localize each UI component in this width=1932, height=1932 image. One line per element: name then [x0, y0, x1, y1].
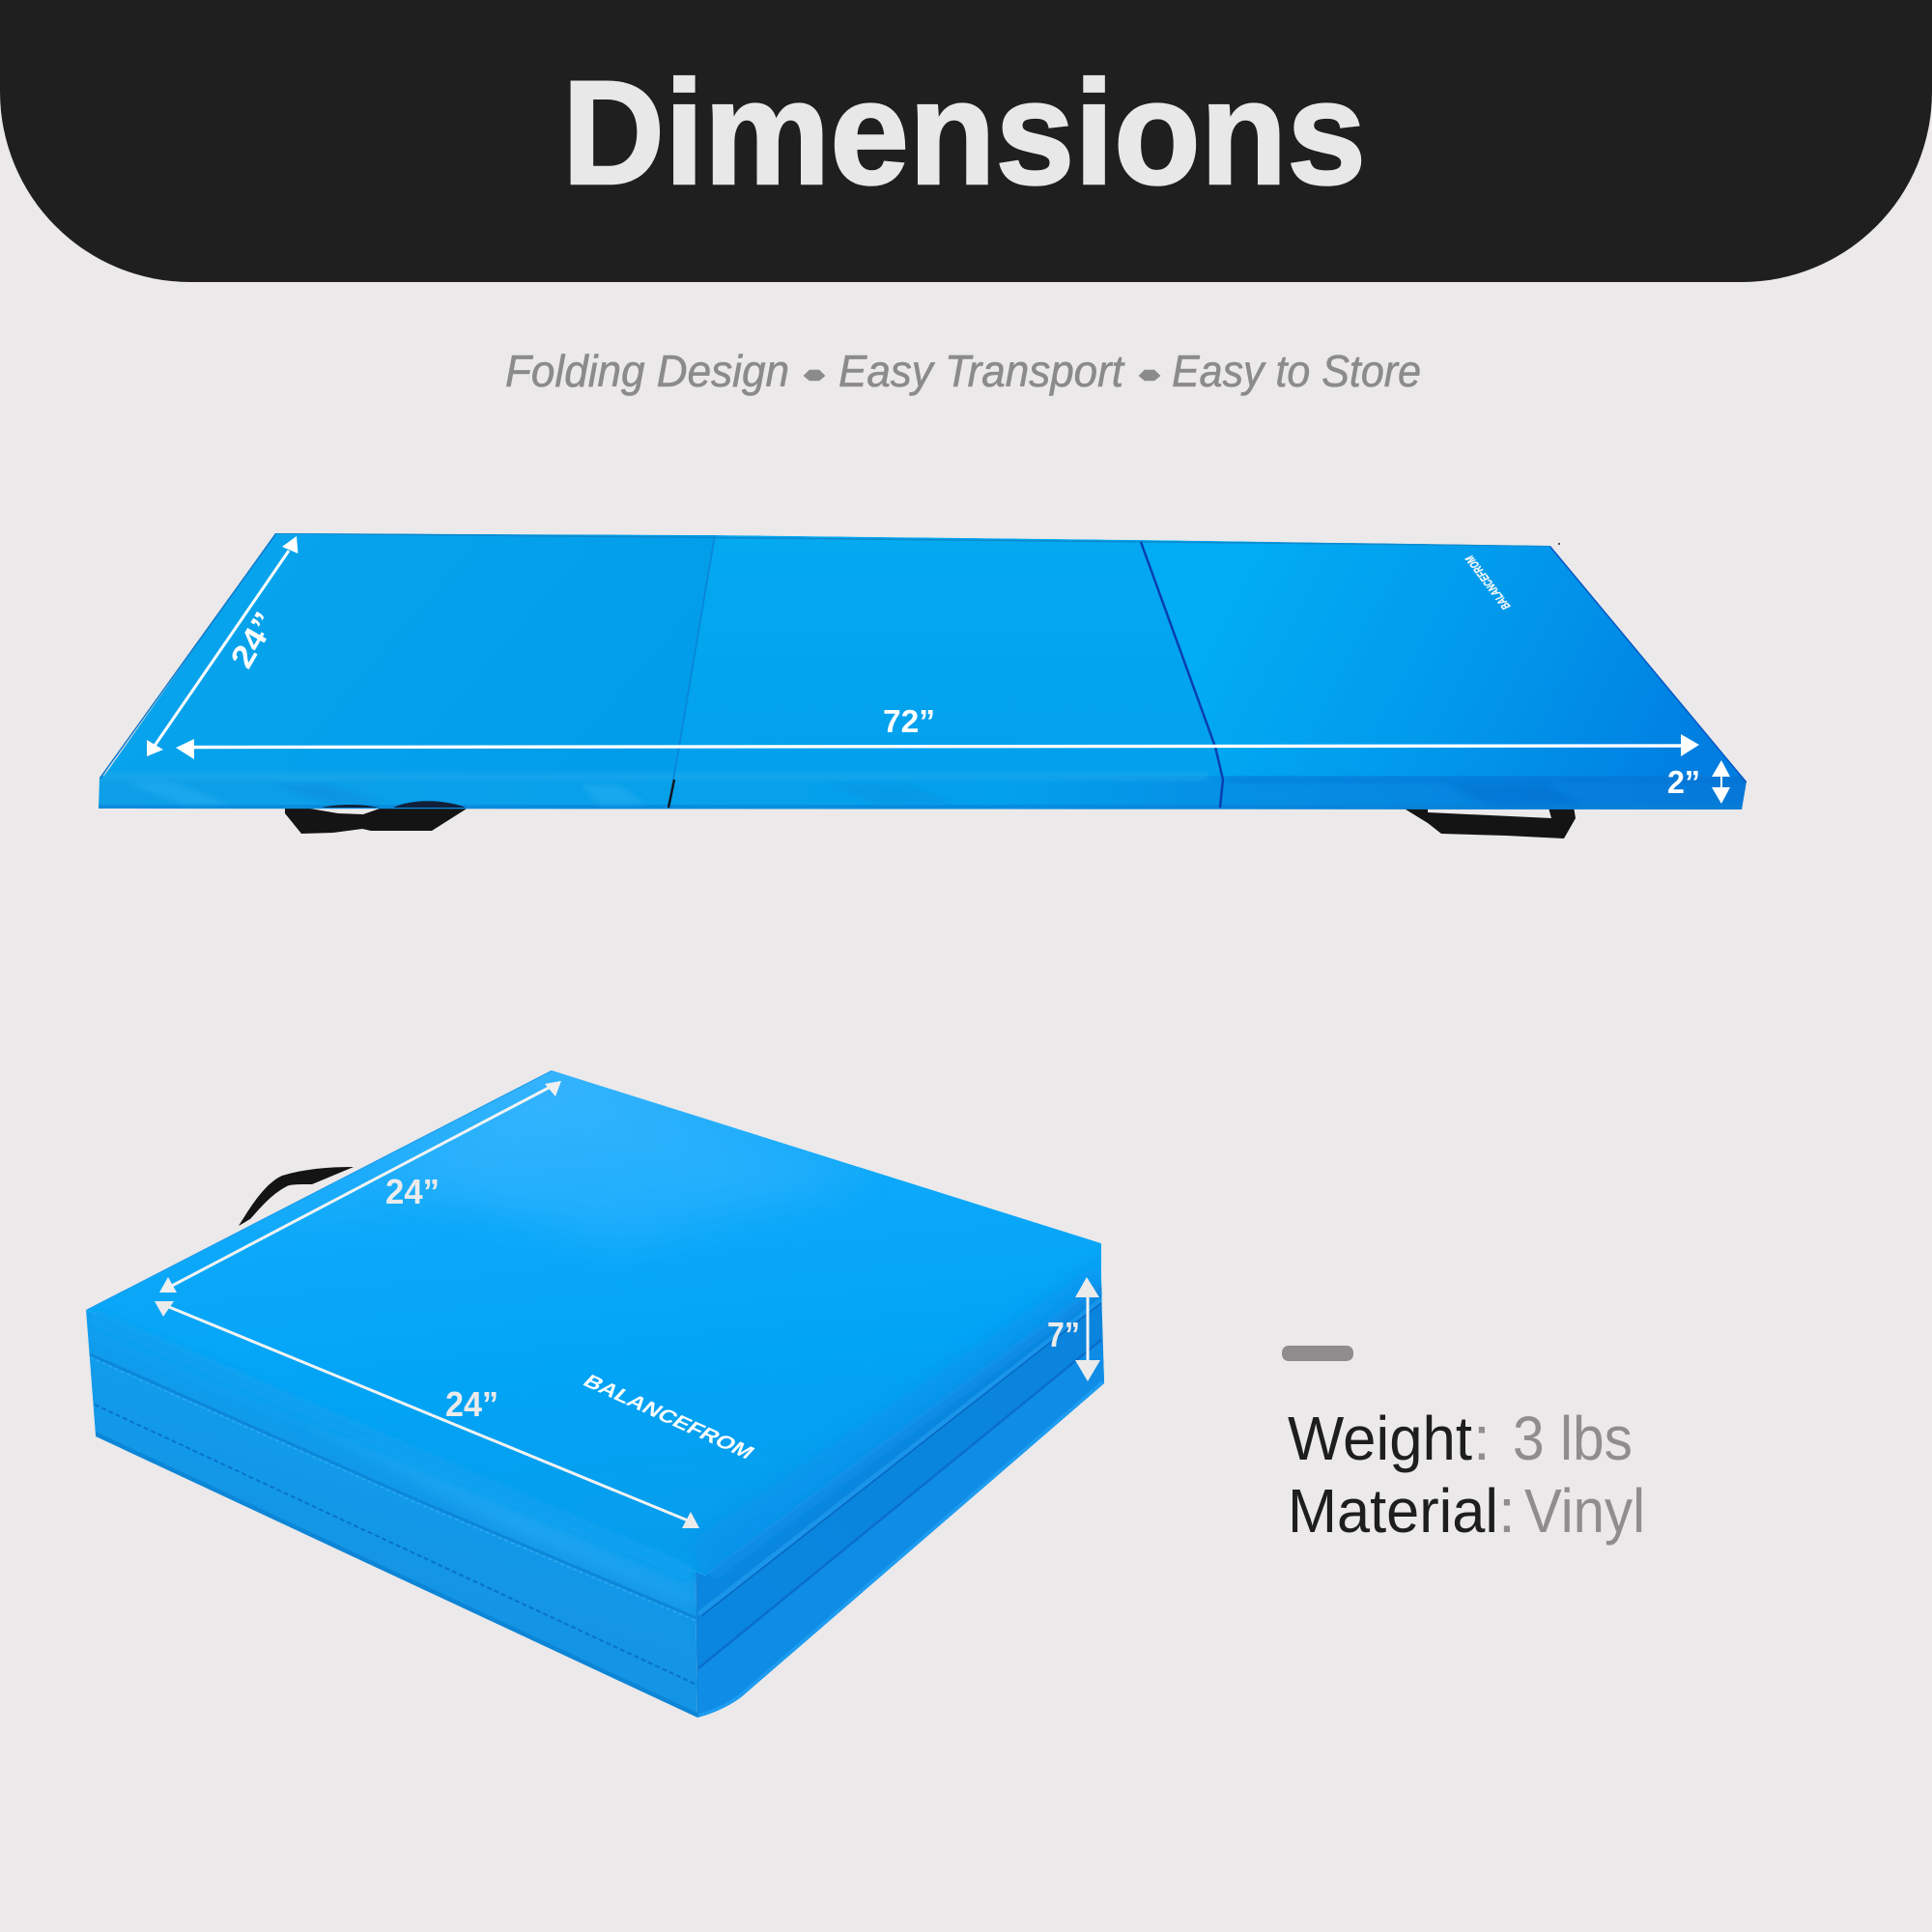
- left side face: [86, 1304, 697, 1718]
- panel: left section: [99, 533, 715, 782]
- material line: Vinyl: [1524, 1476, 1645, 1546]
- handle webbing overlapping mat edge: [322, 801, 466, 808]
- arrow: 7 inch height: [1075, 1277, 1100, 1381]
- label: 24 inch back edge: 24”: [385, 1172, 440, 1211]
- weight and material specs: [1288, 1404, 1645, 1546]
- label: 24 inch front edge: 24”: [445, 1384, 498, 1424]
- arrow: 2 inch thickness: [1712, 760, 1730, 804]
- subtitle features line: Easy to Store: [1172, 346, 1421, 396]
- label: 24 inch width: 24”: [223, 606, 283, 674]
- icon: folded mat handle: [239, 1167, 354, 1226]
- flat unfolded mat: [97, 533, 1750, 838]
- front edge band: [97, 776, 1750, 810]
- logo on folded mat: BALANCEFROM: [579, 1371, 759, 1463]
- weight line: :: [1473, 1404, 1491, 1473]
- icon: right carry handle: [1403, 807, 1576, 838]
- weight line: 3 lbs: [1513, 1404, 1633, 1473]
- arrow: 24 inch front edge: [155, 1301, 699, 1528]
- material line: [1288, 1476, 1645, 1546]
- panel: middle section: [673, 535, 1223, 782]
- subtitle features line: [505, 346, 1421, 396]
- fold notch: [668, 780, 674, 808]
- logo on flat mat: BALANCEFROM: [1463, 554, 1514, 611]
- material line: :: [1498, 1476, 1516, 1546]
- title: Dimensions: [562, 50, 1366, 215]
- fold line 1: [673, 535, 715, 780]
- label: 2 inch thickness: 2”: [1667, 764, 1700, 800]
- small speck: [1558, 543, 1560, 545]
- decorative pill marker: [1282, 1346, 1353, 1361]
- fold line 2: [1141, 542, 1223, 808]
- subtitle features line: Easy Transport: [838, 346, 1125, 396]
- header banner: [0, 0, 1932, 282]
- arrow: 24 inch width: [147, 536, 298, 756]
- soft rounded edges between faces: [92, 1287, 1101, 1577]
- subtitle features line: Folding Design: [505, 346, 789, 396]
- icon: left carry handle: [285, 800, 471, 834]
- folded mat: [86, 1070, 1107, 1719]
- weight line: [1288, 1404, 1633, 1473]
- panel: right section: [1141, 540, 1747, 782]
- material line: Material: [1288, 1476, 1498, 1546]
- arrow: 24 inch back edge: [159, 1081, 561, 1293]
- arrow: 72 inch length: [176, 734, 1699, 759]
- label: 7 inch height: 7”: [1047, 1315, 1080, 1354]
- weight line: Weight: [1288, 1404, 1472, 1473]
- top surface: [86, 1070, 1101, 1579]
- right side face: [696, 1275, 1107, 1719]
- label: 72 inch length: 72”: [883, 703, 935, 739]
- edge shading: [99, 533, 275, 778]
